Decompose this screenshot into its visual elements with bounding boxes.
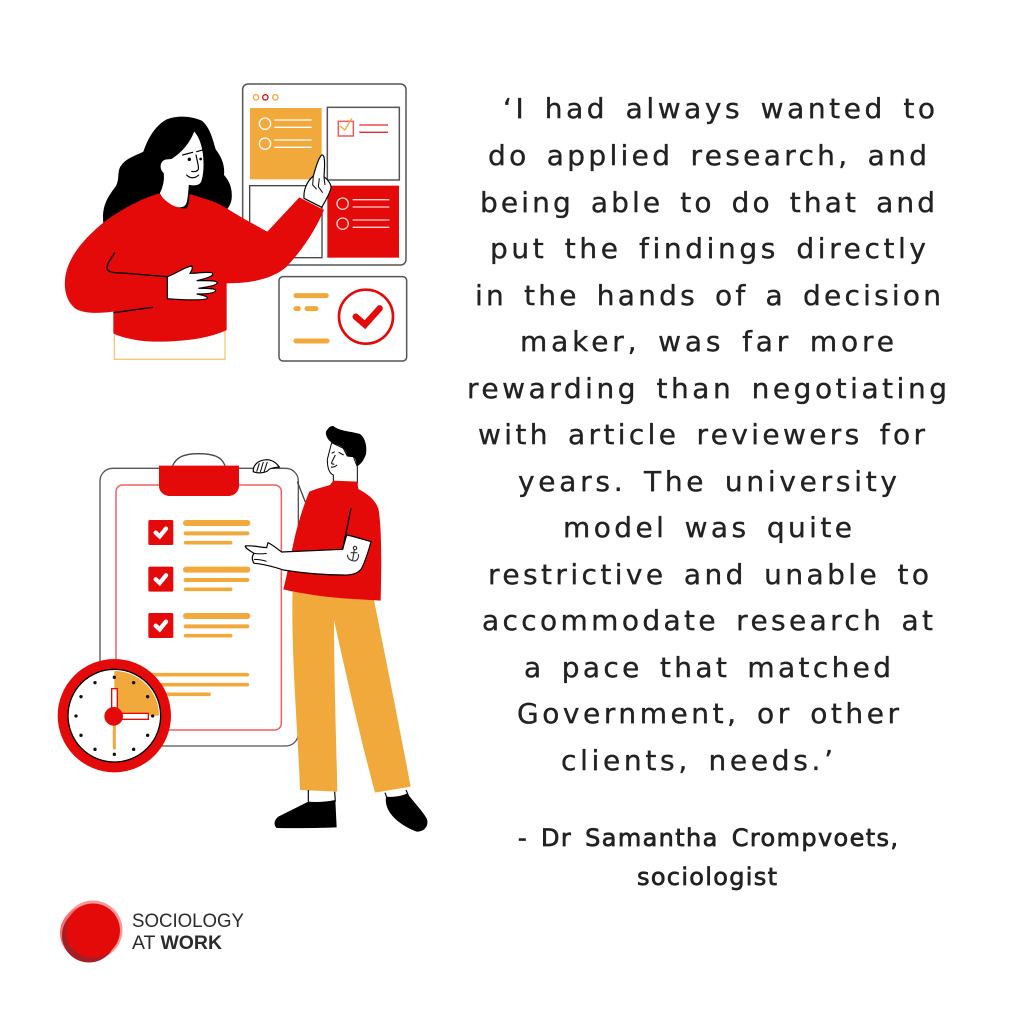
attribution: - Dr Samantha Crompvoets, [518,824,898,852]
quote text: in the hands of a decision [475,279,941,312]
logo wordmark [132,911,244,954]
man's facial features [331,452,344,467]
panel: approval card with check mark [279,277,407,361]
man's socks and shoes [275,790,427,832]
anchor tattoo [347,546,359,561]
woman's pointing hand finger lines [313,176,325,193]
checklist items [148,520,247,694]
quote text: a pace that matched [524,651,891,684]
logo wordmark: AT WORK [132,933,222,954]
clipboard handle [173,454,225,466]
woman's hair [103,117,232,223]
quote text [467,92,947,777]
man's face and neck [327,443,357,483]
quote text: model was quite [563,511,852,544]
clock [58,659,171,772]
attribution: sociologist [637,863,777,891]
woman's trousers outline [114,330,225,359]
clipboard inner sheet [116,485,281,730]
quote text: put the findings directly [490,232,926,265]
quote text: rewarding than negotiating [467,372,947,405]
quote text: clients, needs.’ [561,744,833,777]
man's hand finger lines [254,553,267,561]
quote text: being able to do that and [480,186,935,219]
woman's face and neck [159,131,204,208]
clipboard red clip [159,466,239,496]
quote text: ‘I had always wanted to [503,92,935,125]
logo mark [60,900,122,962]
woman's resting hand [167,266,217,300]
quote text: years. The university [518,465,897,498]
woman's sleeve fold lines [107,252,167,313]
quote text: do applied research, and [488,139,927,172]
man's red shirt [283,481,381,601]
woman's facial features [183,150,203,178]
quote text: maker, was far more [520,325,894,358]
clipboard edge behind shirt [297,482,305,502]
illustration: man beside checklist clipboard [58,426,427,832]
illustration: woman pointing at dashboard [65,84,407,361]
woman's red sweater [65,193,324,342]
man's orange trousers [292,587,411,793]
quote text: accommodate research at [482,604,933,637]
man's pointing arm [245,535,371,575]
logo wordmark: SOCIOLOGY [132,911,244,932]
woman's pointing hand [304,155,331,207]
logo: Sociology at Work [60,900,244,962]
panel: dashboard window [243,84,406,265]
shirt sleeve fold line [343,508,351,549]
man's hair [326,426,366,467]
quote text: Government, or other [517,697,899,730]
man's hand on clipboard [253,460,279,473]
clipboard board [100,468,298,746]
attribution [518,824,898,891]
quote text: with article reviewers for [478,418,925,451]
quote text: restrictive and unable to [488,558,929,591]
